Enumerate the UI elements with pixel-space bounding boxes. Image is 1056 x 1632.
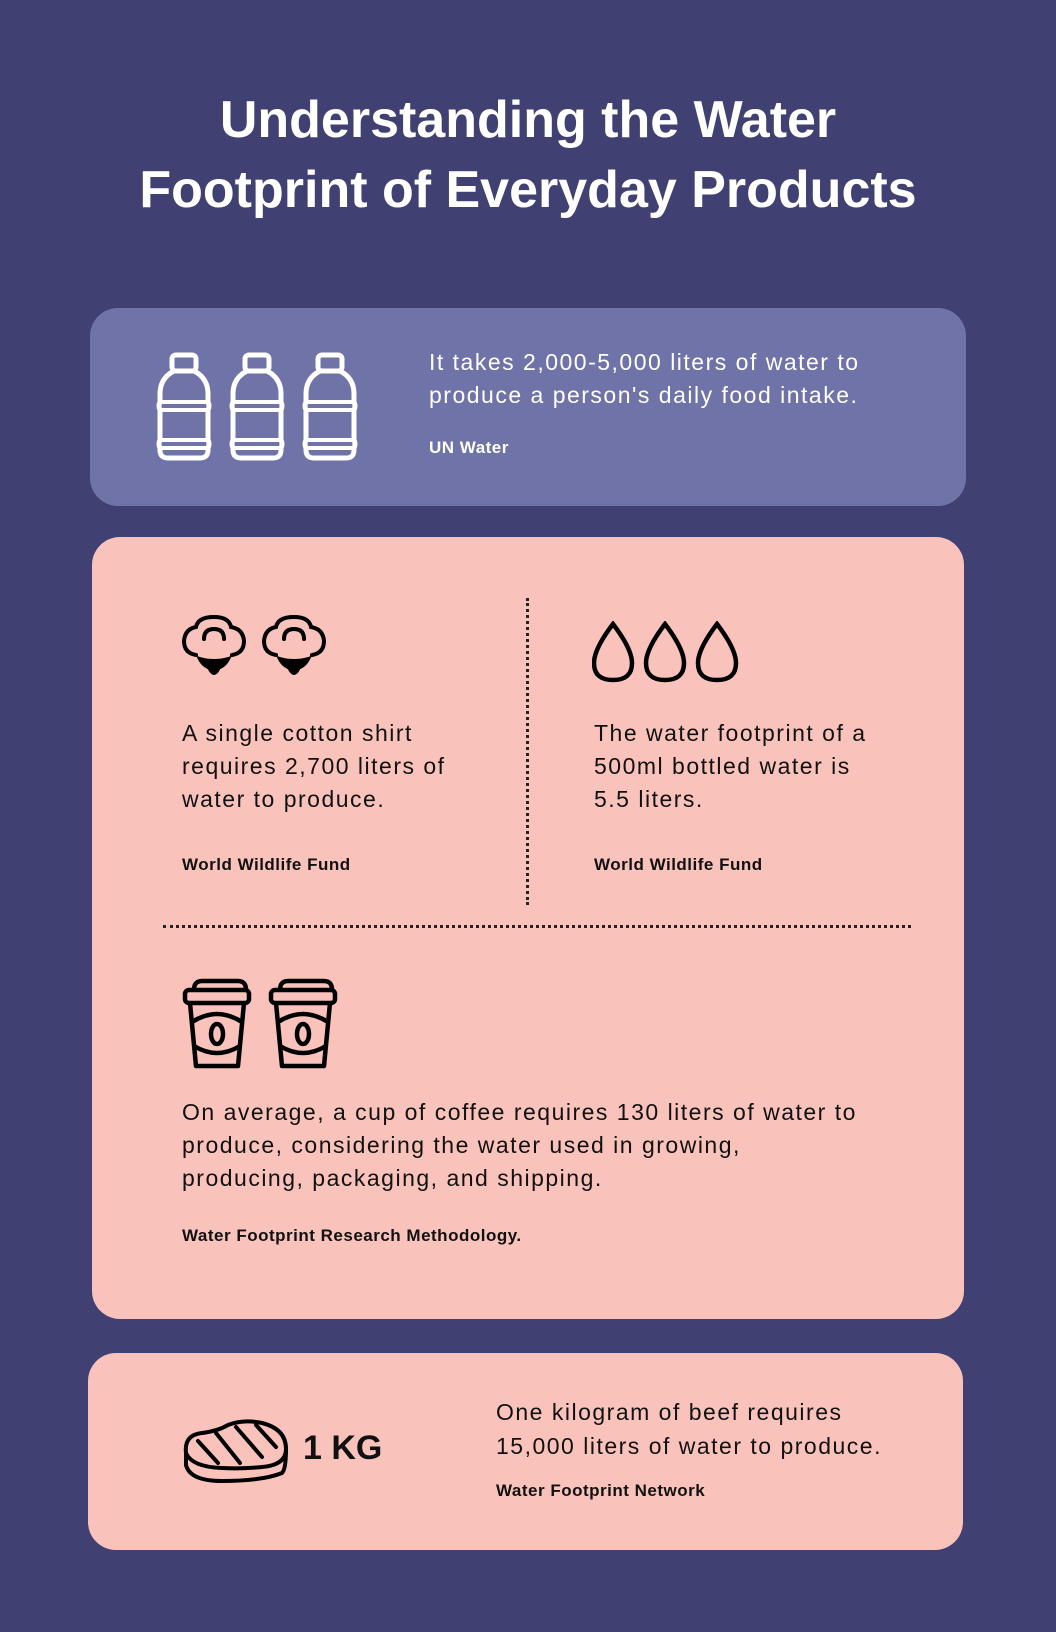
icon: three water bottles bbox=[156, 352, 358, 460]
horizontal dotted divider bbox=[163, 925, 911, 928]
icon: cotton bbox=[182, 615, 326, 675]
text: beef fact: 15,000 liters of water to produce. bbox=[496, 1433, 882, 1459]
source: Water Footprint Network: Water Footprint Network bbox=[496, 1481, 705, 1500]
text: coffee: On average, a cup of coffee requires 130 liters of water to bbox=[182, 1099, 857, 1125]
text: daily food fact bbox=[429, 349, 860, 408]
icon: water drops bbox=[592, 621, 738, 682]
source: water footprint research: Water Footprint Research Methodology. bbox=[182, 1226, 522, 1245]
text: daily food fact: produce a person's daily food intake. bbox=[429, 382, 858, 408]
vertical dotted divider bbox=[526, 598, 529, 905]
text: bottled water: 500ml bottled water is bbox=[594, 753, 851, 779]
source: UN Water: UN Water bbox=[429, 438, 509, 457]
title: Footprint of Everyday Products bbox=[139, 161, 917, 219]
panel: beef bbox=[88, 1353, 963, 1550]
text: beef fact: One kilogram of beef requires bbox=[496, 1399, 842, 1425]
text: coffee bbox=[182, 1099, 857, 1191]
text: bottled water bbox=[594, 720, 867, 812]
text: coffee: producing, packaging, and shipping. bbox=[182, 1165, 603, 1191]
text: cotton shirt: water to produce. bbox=[182, 786, 385, 812]
icon: steak bbox=[184, 1419, 288, 1483]
text: beef fact bbox=[496, 1399, 882, 1459]
title: Understanding the Water bbox=[220, 91, 836, 149]
panel: daily food intake bbox=[90, 308, 966, 506]
text: daily food fact: It takes 2,000-5,000 liters of water to bbox=[429, 349, 860, 375]
text: bottled water: 5.5 liters. bbox=[594, 786, 704, 812]
icon: coffee cups bbox=[182, 978, 338, 1068]
panel: products bbox=[92, 537, 964, 1319]
title bbox=[139, 91, 917, 219]
text: bottled water: The water footprint of a bbox=[594, 720, 867, 746]
source: WWF left: World Wildlife Fund bbox=[182, 855, 351, 874]
text: cotton shirt: A single cotton shirt bbox=[182, 720, 413, 746]
label: 1 KG: 1 KG bbox=[303, 1429, 382, 1467]
text: coffee: produce, considering the water used in growing, bbox=[182, 1132, 741, 1158]
text: cotton shirt bbox=[182, 720, 446, 812]
text: cotton shirt: requires 2,700 liters of bbox=[182, 753, 446, 779]
source: WWF right: World Wildlife Fund bbox=[594, 855, 763, 874]
